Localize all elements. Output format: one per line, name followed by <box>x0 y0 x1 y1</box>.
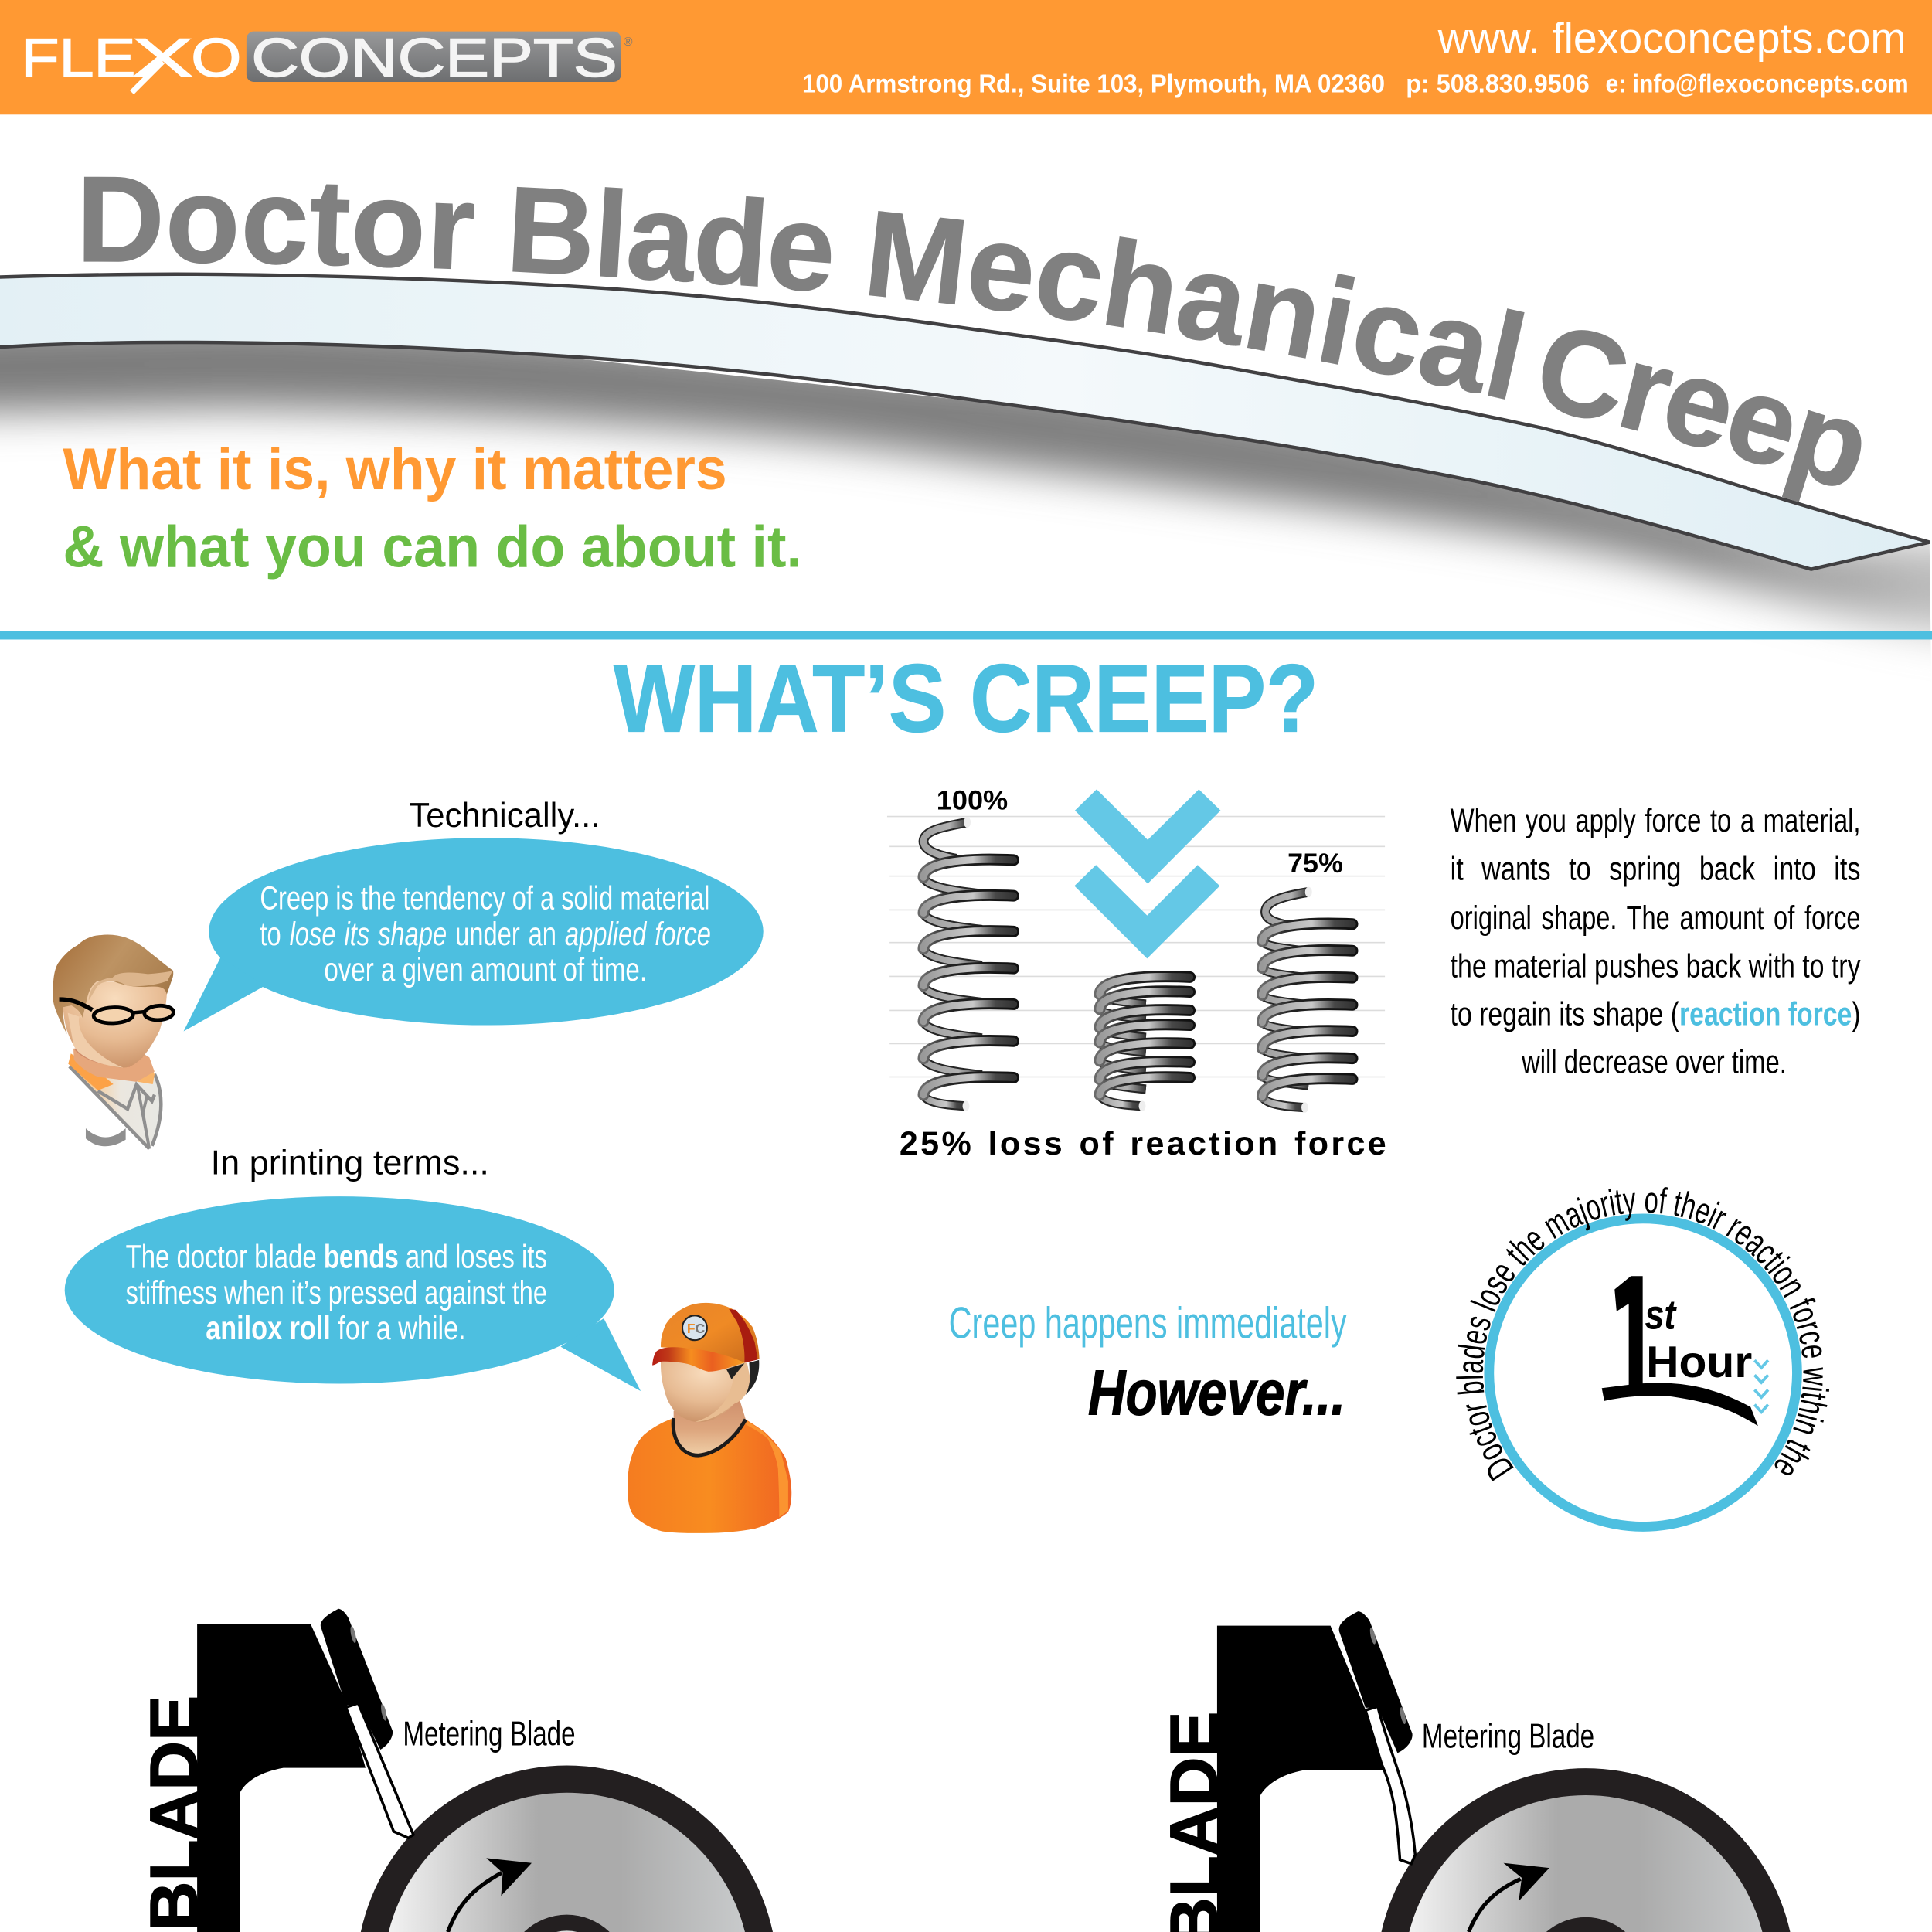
label: metering blade: Metering Blade <box>403 1715 576 1753</box>
icon: press operator with cap <box>628 1303 791 1533</box>
clock: first hour <box>1456 1187 1829 1532</box>
spring: compressed <box>1100 977 1190 1111</box>
speech bubble: printing terms: anilox roll for a while. <box>206 1310 466 1347</box>
rotation arrow <box>448 1858 532 1932</box>
speech bubble: technically: to lose its shape under an applied force <box>260 916 711 953</box>
cap brim <box>652 1347 744 1372</box>
main title on curve: Blade <box>512 187 832 291</box>
logo: ® <box>624 36 633 49</box>
section heading: WHAT’S CREEP? <box>614 645 1318 752</box>
icon: technician with glasses <box>53 935 174 1149</box>
label 75%: 75% <box>1287 849 1343 879</box>
cap <box>661 1303 760 1362</box>
chamber block <box>197 1624 366 1932</box>
cap badge <box>682 1315 707 1340</box>
small chevrons <box>1754 1360 1768 1412</box>
curved doctor blade <box>0 274 1930 570</box>
suit and shirt <box>70 1057 162 1149</box>
logo: X <box>132 27 193 88</box>
logo: FLE <box>21 27 135 88</box>
label: metering blade: Metering Blade <box>1422 1718 1594 1756</box>
contact details: 100 Armstrong Rd., Suite 103, Plymouth, MA 02360 <box>802 70 1385 99</box>
speech bubble: technically: over a given amount of time. <box>324 951 647 988</box>
blade clamp <box>1339 1611 1413 1753</box>
label: in printing terms: In printing terms... <box>211 1144 489 1182</box>
neck <box>73 1047 155 1082</box>
diagram: straight blade <box>136 1609 773 1932</box>
body <box>628 1418 791 1533</box>
contact details: p: 508.830.9506 <box>1406 70 1590 99</box>
rotation arrow <box>1469 1863 1549 1932</box>
main title on curve: Doctor <box>83 176 474 269</box>
chamber block <box>1217 1626 1383 1932</box>
face <box>63 981 167 1068</box>
subtitle line two: & what you can do about it. <box>63 514 802 580</box>
label 100%: 100% <box>937 786 1008 816</box>
bent metering blade <box>1366 1706 1415 1864</box>
metering blade <box>346 1703 413 1838</box>
website: www. flexoconcepts.com <box>1437 14 1906 63</box>
logo <box>21 27 633 93</box>
face <box>661 1360 750 1422</box>
subtitle line one: What it is, why it matters <box>63 437 727 502</box>
logo: CONCEPTS <box>251 27 617 88</box>
speech bubble: printing terms: stiffness when it’s pressed against the <box>126 1274 547 1311</box>
paragraph: reaction force <box>1451 802 1861 1081</box>
back hair <box>746 1360 759 1395</box>
contact details <box>802 70 1909 99</box>
blue divider <box>0 631 1932 639</box>
hair <box>53 935 173 1034</box>
cap badge: FC <box>687 1321 706 1336</box>
spring chart <box>887 786 1386 1162</box>
callout: creep happens immediately: Creep happens immediately <box>949 1299 1347 1349</box>
glasses <box>60 999 174 1024</box>
label: st: st <box>1645 1292 1677 1338</box>
arrow: down chevrons <box>1074 789 1220 958</box>
header bar <box>0 0 1932 114</box>
label: technically: Technically... <box>409 797 600 835</box>
callout: however: However... <box>1088 1356 1345 1428</box>
roll <box>1381 1768 1790 1932</box>
paragraph: reaction force: to regain its shape (reaction force) <box>1451 996 1861 1033</box>
numeral one and clock hand <box>1602 1276 1758 1426</box>
label: hour: Hour <box>1646 1338 1752 1387</box>
spring: relaxed 75% <box>1262 887 1352 1113</box>
forelock highlight <box>89 971 172 1001</box>
speech bubble: technically: Creep is the tendency of a solid material <box>260 880 709 917</box>
main title on curve: Mechanical <box>869 211 1525 400</box>
speech bubble: printing terms: The doctor blade bends and loses its <box>126 1239 547 1276</box>
belt arc <box>86 1128 126 1146</box>
main title on curve <box>83 176 1861 502</box>
speech bubble: technically <box>184 838 764 1032</box>
blade clamp <box>321 1609 393 1750</box>
speech bubble: printing terms <box>65 1196 641 1391</box>
roll <box>361 1766 773 1932</box>
vertical label: BLADE <box>136 1696 212 1930</box>
chart caption: 25% loss of reaction force <box>900 1125 1386 1162</box>
paragraph: reaction force: will decrease over time. <box>1521 1044 1787 1081</box>
diagram: bent blade <box>1156 1611 1790 1932</box>
chart grid lines <box>887 817 1385 1077</box>
sideburn <box>726 1363 744 1379</box>
main title on curve: Creep <box>1543 330 1861 502</box>
spring: full height <box>923 817 1014 1111</box>
logo: O <box>191 27 242 88</box>
curved caption: Doctor blades lose the majority of their reaction force within the <box>1456 1187 1829 1481</box>
neck and collar <box>673 1399 746 1455</box>
blade shadow <box>0 318 1932 638</box>
